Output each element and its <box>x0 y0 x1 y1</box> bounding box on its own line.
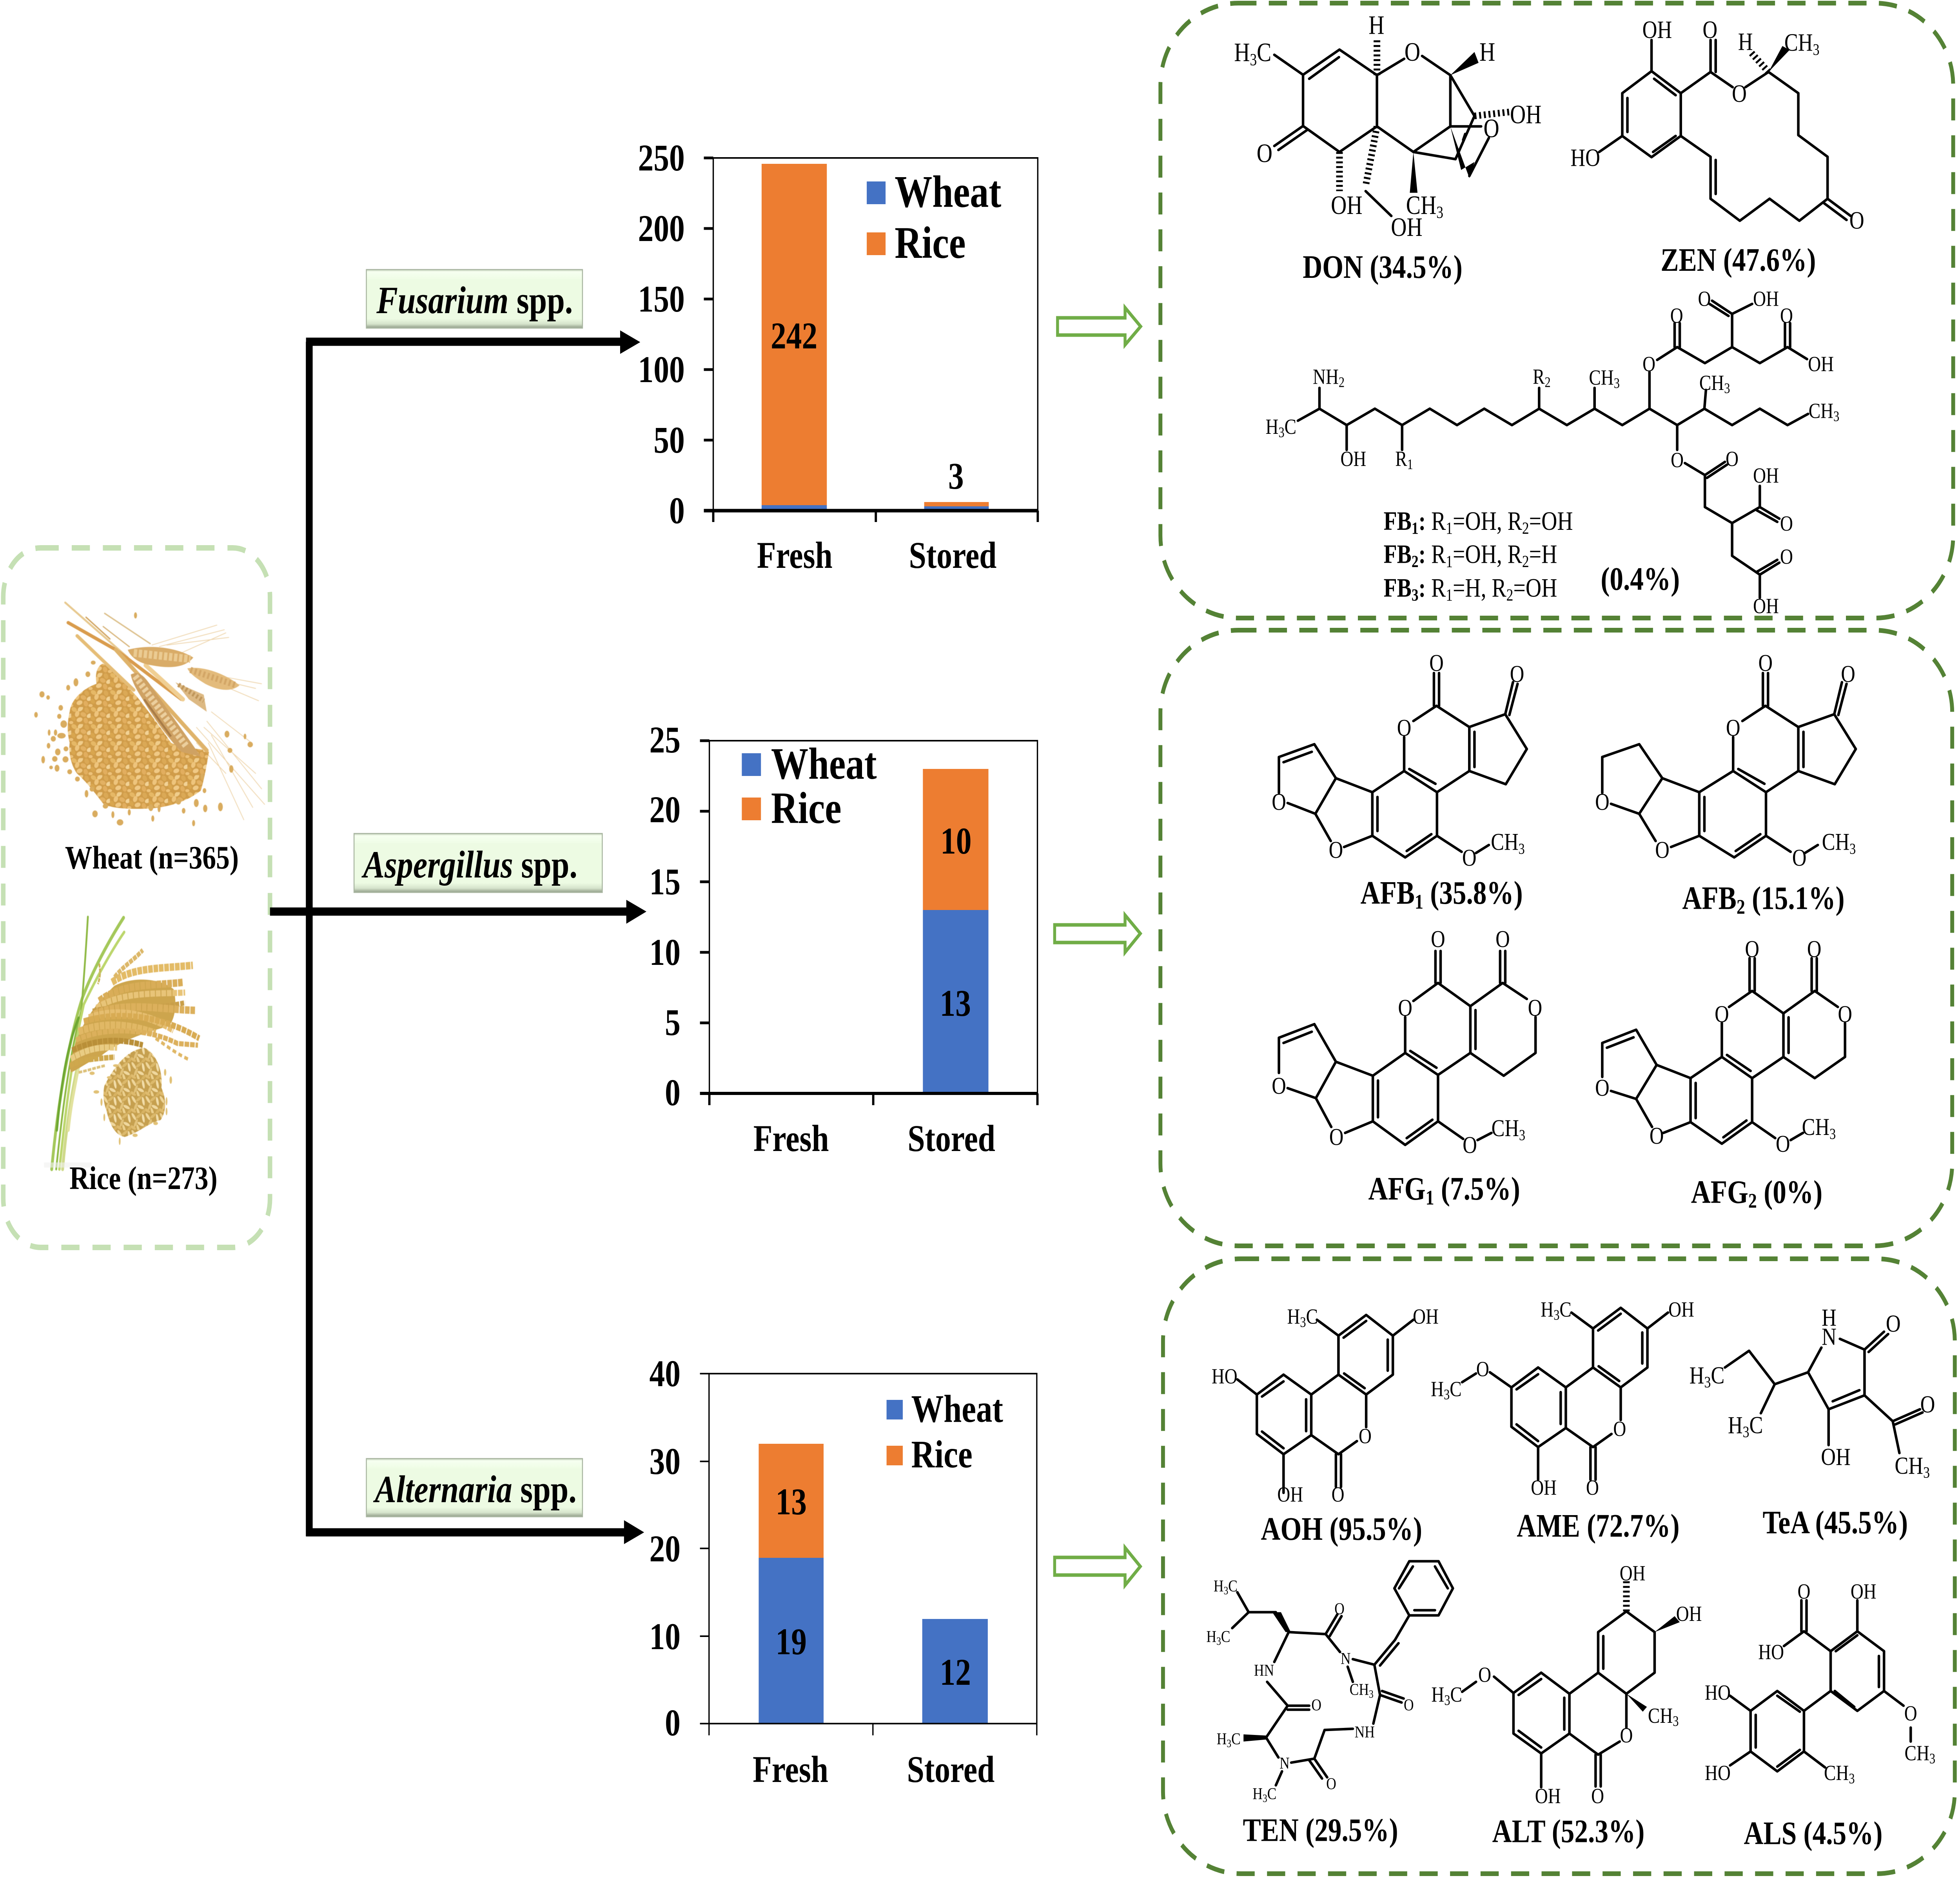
molecule: TEN: 3 <box>1227 1737 1231 1749</box>
heading: Alternaria spp.: Alternaria spp. <box>373 1468 577 1511</box>
molecule: ALS: CH <box>1824 1761 1849 1785</box>
molecule: AFG1: O <box>1329 1124 1343 1151</box>
label: AFG1: AFG <box>1368 1171 1426 1207</box>
molecule: DON: OH <box>1391 213 1423 242</box>
y axis labels: 0 <box>669 490 685 532</box>
molecule: AME: C <box>1450 1377 1462 1401</box>
molecule: AOH: OH <box>1277 1483 1303 1506</box>
x axis labels <box>753 1749 995 1791</box>
molecule: AFB2 <box>1595 650 1856 919</box>
molecule: TEN: O <box>1326 1775 1336 1793</box>
molecule: AFG1 <box>1272 926 1542 1209</box>
label: FB variants: 1 <box>1412 519 1419 538</box>
label: FB variants: 2 <box>1522 552 1529 571</box>
y axis labels: 5 <box>665 1002 681 1044</box>
heading: Aspergillus spp. <box>354 834 602 892</box>
molecule: ZEN: O <box>1849 207 1864 234</box>
molecule: fumonisins: O <box>1780 511 1793 535</box>
molecule: AFB1: CH <box>1491 829 1519 856</box>
x axis labels: Stored <box>907 1118 995 1160</box>
molecule: TeA: H <box>1728 1411 1743 1439</box>
label: AFG2: 2 <box>1748 1189 1757 1213</box>
molecule: AOH: O <box>1332 1483 1345 1506</box>
molecule: fumonisins: H <box>1266 415 1278 439</box>
molecule: DON: O <box>1257 139 1272 168</box>
molecule: AFG2: O <box>1745 936 1759 963</box>
heading: Fusarium spp.: Fusarium spp. <box>376 279 573 322</box>
panel: Fusarium toxins <box>1160 3 1953 618</box>
bar: Fresh <box>759 1444 824 1724</box>
label: FB variants: 1 <box>1446 586 1453 604</box>
molecule: DON: OH <box>1510 100 1542 129</box>
label: FB variants: =OH <box>1513 574 1557 603</box>
label: wheat sample count: Wheat (n=365) <box>65 839 239 876</box>
molecule: TeA <box>1690 1303 1935 1541</box>
legend <box>887 1387 1003 1476</box>
molecule: TEN: N <box>1341 1650 1351 1668</box>
molecule: fumonisins: NH <box>1313 365 1339 389</box>
molecule: AME: O <box>1476 1357 1489 1381</box>
molecule: AME: H <box>1431 1377 1444 1401</box>
molecule: fumonisins: 2 <box>1545 375 1551 390</box>
molecule: TEN: 3 <box>1223 1584 1228 1597</box>
icon: rice panicle and grain pile <box>44 917 199 1169</box>
molecule: TEN: HN <box>1254 1661 1274 1680</box>
y axis labels: 40 <box>649 1353 681 1395</box>
y axis labels <box>638 137 685 532</box>
label: TeA: TeA (45.5%) <box>1763 1505 1908 1541</box>
y axis labels: 0 <box>665 1702 681 1744</box>
legend: Wheat <box>771 739 877 789</box>
molecule: AFB2: O <box>1792 845 1806 871</box>
bar: Stored <box>922 1619 988 1724</box>
molecule: AFG1: O <box>1398 995 1412 1021</box>
label: AFG1: (7.5%) <box>1434 1171 1520 1207</box>
molecule: TEN: C <box>1231 1730 1241 1748</box>
molecule: ALS: OH <box>1851 1579 1877 1603</box>
molecule: ALS: HO <box>1758 1640 1784 1664</box>
bar chart: Aspergillus <box>649 719 1038 1160</box>
molecule: ALS: O <box>1904 1701 1917 1725</box>
molecule: fumonisins: CH <box>1809 399 1833 422</box>
molecule: fumonisins: CH <box>1699 371 1724 395</box>
label: FB variants: FB <box>1384 540 1412 569</box>
molecule: AOH: OH <box>1413 1305 1439 1329</box>
legend: Wheat <box>895 167 1001 217</box>
molecule: AFG1: 3 <box>1519 1126 1525 1144</box>
label: FB variants: R <box>1431 507 1446 536</box>
molecule: fumonisins: O <box>1780 303 1793 327</box>
molecule: AFB2: O <box>1595 789 1610 815</box>
label: FB percentage: (0.4%) <box>1601 561 1680 597</box>
heading: Aspergillus spp.: Aspergillus spp. <box>361 843 577 886</box>
label: FB variants: 3 <box>1412 586 1419 604</box>
bar: Stored: 12 <box>940 1651 971 1693</box>
molecule: DON: OH <box>1331 191 1363 220</box>
molecule: AOH <box>1212 1305 1439 1547</box>
label: FB variants: R <box>1431 574 1446 603</box>
molecule: TeA: O <box>1886 1309 1901 1337</box>
molecule: TEN: H <box>1217 1730 1227 1748</box>
label: FB variants: 2 <box>1412 552 1419 571</box>
molecule: fumonisins: OH <box>1753 594 1779 618</box>
molecule: ZEN: HO <box>1570 144 1600 172</box>
x axis labels: Stored <box>909 535 996 576</box>
icon: wheat ears and grain pile <box>34 603 265 826</box>
molecule: ALT: 3 <box>1673 1714 1679 1729</box>
panel: cereal samples <box>3 548 270 1247</box>
molecule: TEN: H <box>1214 1577 1223 1595</box>
molecule: ALT <box>1431 1561 1702 1849</box>
molecule: fumonisins: 3 <box>1278 425 1285 440</box>
label: FB variants: : <box>1419 507 1426 536</box>
bar: Fresh: 242 <box>771 315 817 357</box>
panel: Alternaria toxins <box>1163 1259 1955 1874</box>
molecule: ALT: C <box>1450 1682 1462 1706</box>
molecule: ALT: H <box>1431 1682 1444 1706</box>
molecule: AFB1: O <box>1397 715 1411 741</box>
molecule: AME: O <box>1586 1476 1599 1499</box>
molecule: TEN: H <box>1252 1785 1263 1803</box>
molecule: ALS: HO <box>1705 1680 1731 1704</box>
molecule: DON: 3 <box>1436 203 1443 222</box>
molecule: fumonisins: O <box>1726 447 1739 471</box>
legend: Rice <box>895 218 966 268</box>
arrow: branching trunk connector <box>270 342 630 1536</box>
bar: Stored <box>924 455 989 511</box>
molecule: AFB2: O <box>1841 661 1855 687</box>
bar: Fresh: 13 <box>775 1481 807 1523</box>
molecule: fumonisins: OH <box>1340 447 1366 471</box>
label: AFB1: 1 <box>1415 890 1423 913</box>
molecule: AFG2 <box>1595 936 1852 1213</box>
bar chart: Fusarium <box>638 137 1038 576</box>
molecule: fumonisins: 3 <box>1614 375 1620 392</box>
molecule: AFG1: O <box>1272 1073 1286 1099</box>
label: FB variants: 2 <box>1506 586 1513 604</box>
molecule: fumonisins: R <box>1395 447 1407 471</box>
label: FB variants: =H, R <box>1453 574 1506 603</box>
molecule: AFB2: O <box>1758 650 1773 676</box>
molecule: TEN: C <box>1221 1628 1230 1646</box>
molecule: TeA: OH <box>1821 1443 1851 1470</box>
molecule: ZEN: 3 <box>1813 41 1820 59</box>
molecule: fumonisins: R <box>1533 365 1545 389</box>
molecule: AME <box>1431 1297 1694 1544</box>
legend: Wheat <box>911 1387 1003 1430</box>
molecule: ZEN: O <box>1732 80 1747 107</box>
molecule: fumonisins: O <box>1642 352 1655 376</box>
label: FB variants: : <box>1419 540 1426 569</box>
y axis labels <box>649 1353 681 1744</box>
molecule: fumonisins: 3 <box>1833 409 1839 424</box>
molecule: DON <box>1234 11 1542 285</box>
molecule: TEN: O <box>1334 1600 1345 1618</box>
molecule: fumonisins: OH <box>1753 287 1779 311</box>
x axis labels <box>753 1118 995 1160</box>
bar: Fresh <box>762 164 827 511</box>
molecule: ZEN <box>1570 16 1864 278</box>
label: ZEN: ZEN (47.6%) <box>1661 242 1816 278</box>
label: AFB2: 2 <box>1737 895 1745 919</box>
molecule: AFG1: CH <box>1492 1115 1519 1142</box>
molecule: TeA: O <box>1920 1390 1935 1418</box>
label: FB variants: 2 <box>1522 519 1529 538</box>
bar: Stored <box>923 769 989 1093</box>
molecule: fumonisins: OH <box>1753 464 1779 488</box>
molecule: ALT: O <box>1591 1784 1604 1808</box>
molecule: AFB1: O <box>1329 837 1343 863</box>
molecule: AFB1: O <box>1429 650 1444 676</box>
molecule: ALS: O <box>1797 1579 1810 1603</box>
x axis labels: Fresh <box>753 1749 828 1791</box>
molecule: ALT: O <box>1620 1723 1633 1747</box>
y axis labels <box>649 719 681 1114</box>
molecule: AFG2: O <box>1807 936 1821 963</box>
molecule: DON: H <box>1479 38 1495 67</box>
molecule: AFG2: O <box>1776 1131 1790 1157</box>
molecule: TEN: 3 <box>1263 1792 1267 1805</box>
molecule: fumonisins: 3 <box>1724 381 1730 397</box>
molecule: TEN: 3 <box>1369 1688 1374 1700</box>
molecule: ALS: 3 <box>1929 1751 1935 1767</box>
molecule: ALS: HO <box>1705 1761 1731 1785</box>
label: FB variants: 1 <box>1446 519 1453 538</box>
label: FB variants: =H <box>1529 540 1557 569</box>
x axis labels: Stored <box>907 1749 995 1791</box>
label: AFB2: AFB <box>1682 880 1737 916</box>
molecule: AFG1: O <box>1431 926 1445 952</box>
molecule: TeA: C <box>1711 1361 1724 1389</box>
arrow: to Fusarium chart <box>620 330 640 354</box>
molecule: AME: C <box>1559 1297 1572 1321</box>
molecule: AFG1: O <box>1528 995 1542 1021</box>
molecule: TEN: NH <box>1355 1723 1375 1741</box>
molecule: TEN: N <box>1279 1754 1290 1773</box>
molecule: ALS: CH <box>1905 1741 1929 1765</box>
molecule: AOH: O <box>1359 1424 1372 1448</box>
bar: Fresh: 19 <box>775 1621 807 1663</box>
molecule: AFB2: O <box>1726 715 1740 741</box>
molecule: AME: H <box>1541 1297 1553 1321</box>
bar: Stored: 10 <box>940 820 971 862</box>
y axis labels: 30 <box>649 1441 681 1483</box>
molecule: ZEN: OH <box>1642 16 1672 44</box>
molecule: TeA: CH <box>1895 1452 1923 1479</box>
molecule: fumonisins: 2 <box>1339 375 1345 390</box>
molecule: AOH: H <box>1287 1305 1300 1329</box>
label: FB variants <box>1384 507 1573 604</box>
arrow: Fusarium to toxins <box>1058 308 1141 345</box>
molecule: DON: CH <box>1406 191 1436 220</box>
label: DON: DON (34.5%) <box>1303 249 1463 285</box>
label: FB variants: =OH <box>1529 507 1573 536</box>
molecule: TeA: 3 <box>1704 1374 1711 1391</box>
x axis labels <box>757 535 996 576</box>
molecule: fumonisins <box>1266 287 1839 618</box>
molecule: AOH: 3 <box>1300 1314 1306 1330</box>
molecule: AME: 3 <box>1553 1307 1559 1323</box>
y axis labels: 20 <box>649 789 681 831</box>
molecule: TEN: O <box>1404 1696 1414 1714</box>
label: AFB1: AFB <box>1360 875 1415 911</box>
panel: Aspergillus toxins <box>1160 630 1952 1246</box>
molecule: DON: 3 <box>1250 50 1257 69</box>
molecule: AFG2: O <box>1838 1001 1852 1028</box>
bar: Stored: 3 <box>948 455 964 497</box>
molecule: TEN: H <box>1207 1628 1216 1646</box>
y axis labels: 10 <box>649 932 681 973</box>
molecule: AFB1: O <box>1272 789 1286 815</box>
label: AME: AME (72.7%) <box>1517 1508 1680 1544</box>
molecule: ALS <box>1705 1579 1935 1851</box>
legend: Rice <box>771 783 842 833</box>
bar: Stored: 13 <box>940 983 971 1024</box>
label: ALS: ALS (4.5%) <box>1744 1815 1882 1851</box>
y axis labels: 25 <box>649 719 681 761</box>
molecule: fumonisins: O <box>1698 287 1711 311</box>
molecule: DON: C <box>1257 38 1271 67</box>
molecule: AFB2: O <box>1655 837 1670 863</box>
molecule: ALT: O <box>1478 1663 1491 1686</box>
molecule: AME: 3 <box>1444 1387 1450 1403</box>
label: FB variants: FB <box>1384 574 1412 603</box>
molecule: TeA: C <box>1749 1411 1763 1439</box>
molecule: TEN: O <box>1311 1696 1321 1714</box>
molecule: AFB1: O <box>1462 845 1477 871</box>
molecule: fumonisins: O <box>1671 448 1684 472</box>
molecule: AFG2: 3 <box>1829 1125 1836 1142</box>
molecule: ZEN: H <box>1738 28 1753 56</box>
molecule: ALT: OH <box>1620 1561 1646 1585</box>
label: AFB1: (35.8%) <box>1423 875 1523 911</box>
molecule: fumonisins: O <box>1670 303 1683 327</box>
legend <box>742 739 877 833</box>
molecule: ALT: OH <box>1676 1602 1702 1626</box>
molecule: DON: H <box>1234 38 1250 67</box>
label: rice sample count: Rice (n=273) <box>69 1160 218 1196</box>
molecule: AFG2: CH <box>1802 1114 1829 1140</box>
molecule: DON: O <box>1483 114 1499 143</box>
label: FB variants: : <box>1419 574 1426 603</box>
molecule: AFB1: 3 <box>1519 840 1525 857</box>
bar chart: Alternaria <box>649 1353 1037 1791</box>
label: AFG2: (0%) <box>1757 1174 1822 1210</box>
molecule: TEN: C <box>1267 1785 1276 1803</box>
molecule: TeA: N <box>1822 1323 1837 1350</box>
molecule: TeA: 3 <box>1743 1423 1749 1441</box>
arrow: Alternaria to toxins <box>1054 1548 1140 1585</box>
molecule: fumonisins: C <box>1285 415 1296 439</box>
molecule: TEN: CH <box>1350 1680 1369 1699</box>
molecule: TeA: H <box>1822 1303 1837 1331</box>
molecule: TEN: 3 <box>1216 1635 1221 1648</box>
label: FB variants: R <box>1431 540 1446 569</box>
label: FB variants: 1 <box>1446 552 1453 571</box>
molecule: ZEN: CH <box>1784 29 1813 56</box>
molecule: AFB1 <box>1272 650 1527 913</box>
legend: Rice <box>911 1432 973 1476</box>
molecule: TEN: C <box>1228 1577 1238 1595</box>
arrow: to Alternaria chart <box>624 1520 644 1544</box>
y axis labels: 20 <box>649 1528 681 1570</box>
molecule: AFB2: 3 <box>1849 840 1856 857</box>
molecule: DON: O <box>1405 38 1420 67</box>
molecule: AME: OH <box>1668 1297 1694 1321</box>
molecule: ALS: 3 <box>1849 1771 1855 1787</box>
molecule: AFB1: O <box>1510 661 1524 687</box>
y axis labels: 10 <box>649 1616 681 1658</box>
y axis labels: 100 <box>638 349 685 391</box>
label: FB variants: =OH, R <box>1453 507 1523 536</box>
molecule: AFG1: O <box>1463 1132 1477 1158</box>
x axis labels: Fresh <box>753 1118 829 1160</box>
y axis labels: 15 <box>649 861 681 903</box>
molecule: fumonisins: CH <box>1589 366 1614 390</box>
molecule: AOH: HO <box>1212 1364 1238 1388</box>
molecule: ALT: CH <box>1648 1704 1673 1728</box>
label: AFB2: (15.1%) <box>1745 880 1845 916</box>
molecule: DON: H <box>1368 11 1384 40</box>
molecule: fumonisins: 1 <box>1407 457 1413 473</box>
molecule: ZEN: O <box>1702 16 1717 44</box>
label: ALT: ALT (52.3%) <box>1492 1813 1644 1849</box>
label: AFG1: 1 <box>1426 1186 1434 1209</box>
molecule: fumonisins: O <box>1780 545 1793 569</box>
y axis labels: 150 <box>638 278 685 320</box>
molecule: AFB2: CH <box>1822 829 1849 856</box>
label: AFG2: AFG <box>1691 1174 1748 1210</box>
arrow: to Aspergillus chart <box>626 900 646 924</box>
molecule: AFG1: O <box>1495 926 1510 952</box>
molecule: AFG2: O <box>1650 1123 1664 1149</box>
molecule: ALT: OH <box>1535 1784 1561 1808</box>
y axis labels: 200 <box>638 208 685 250</box>
molecule: TEN <box>1207 1561 1453 1848</box>
label: AOH: AOH (95.5%) <box>1261 1511 1422 1547</box>
x axis labels: Fresh <box>757 535 833 576</box>
legend <box>867 167 1001 268</box>
molecule: TeA: 3 <box>1923 1464 1930 1481</box>
label: FB variants: =OH, R <box>1453 540 1523 569</box>
y axis labels: 0 <box>665 1072 681 1114</box>
heading: Fusarium spp. <box>367 270 583 328</box>
y axis labels: 50 <box>653 419 685 461</box>
molecule: TeA: H <box>1690 1361 1704 1389</box>
molecule: fumonisins: OH <box>1808 352 1834 376</box>
y axis labels: 250 <box>638 137 685 179</box>
molecule: ALT: 3 <box>1444 1693 1450 1708</box>
molecule: AOH: C <box>1306 1305 1318 1329</box>
molecule: AFG2: O <box>1595 1075 1610 1101</box>
molecule: AME: O <box>1613 1417 1626 1441</box>
label: FB variants: FB <box>1384 507 1412 536</box>
heading: Alternaria spp. <box>367 1459 583 1517</box>
label: TEN: TEN (29.5%) <box>1243 1812 1398 1848</box>
molecule: AFG2: O <box>1715 1001 1729 1028</box>
molecule: AME: OH <box>1531 1476 1557 1499</box>
arrow: Aspergillus to toxins <box>1054 915 1140 952</box>
